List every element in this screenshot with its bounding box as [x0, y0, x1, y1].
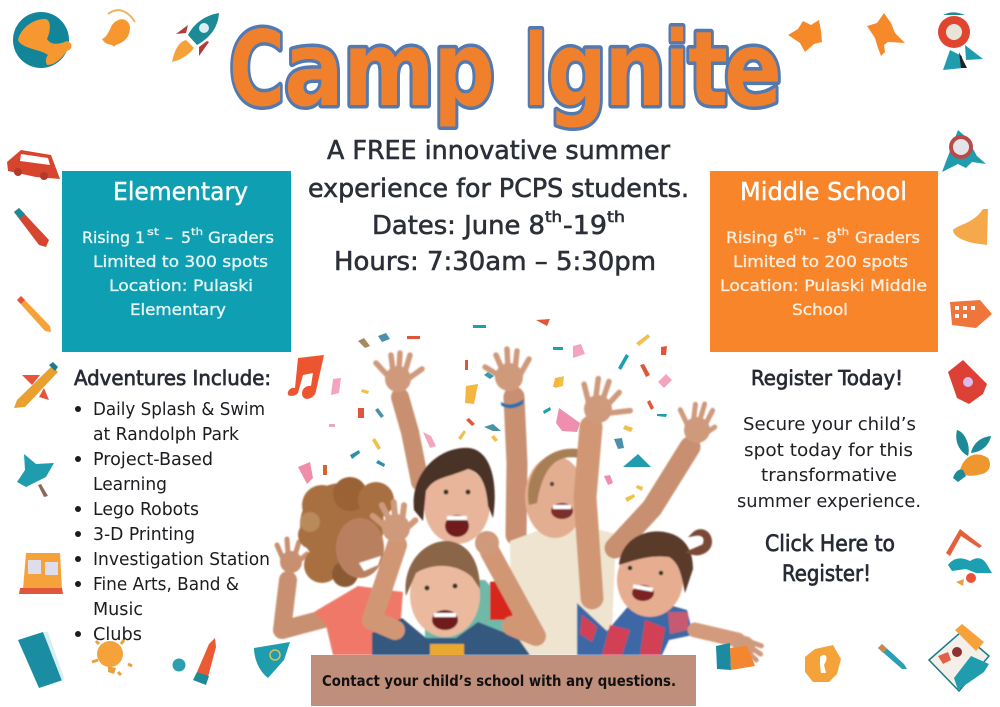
icon: music note	[288, 355, 324, 399]
icon: blue book	[18, 632, 64, 688]
icon: calendar	[950, 300, 992, 328]
bullet items: at Randolph Park	[93, 424, 240, 445]
middle school details: th	[794, 227, 806, 238]
elementary details: Location: Pulaski	[109, 276, 253, 295]
curly child	[282, 580, 327, 630]
title: p	[433, 10, 495, 130]
photo: five cheering children	[277, 349, 765, 663]
adventures list	[74, 366, 271, 645]
call to action: Click Here to	[765, 532, 895, 557]
icon: fish globe	[13, 12, 72, 68]
subtitle block: Dates: June 8	[372, 211, 545, 241]
bullet items: Clubs	[93, 624, 142, 645]
bullet items: Lego Robots	[93, 499, 199, 520]
subtitle block: -19	[563, 211, 607, 241]
right child raised arm	[585, 427, 592, 598]
child: back centre raised arm	[400, 397, 420, 482]
register paragraph: spot today for this	[744, 440, 913, 461]
icon: house and wave	[946, 529, 992, 586]
icon: teal leaf	[17, 454, 54, 497]
curly hair	[298, 477, 394, 587]
icon: rocket	[172, 13, 219, 62]
subtitle block	[308, 136, 689, 277]
title: i	[665, 10, 689, 130]
right front child	[577, 596, 693, 655]
icon: tram	[19, 553, 63, 594]
elementary details: Elementary	[130, 300, 226, 319]
hand: back right	[485, 349, 529, 391]
child: back right raised arm	[514, 397, 517, 535]
register paragraph: summer experience.	[737, 491, 921, 512]
icon: small book in hand	[716, 643, 755, 670]
elementary details	[82, 227, 274, 319]
elementary details: Limited to 300 spots	[93, 252, 268, 271]
register paragraph: Secure your child’s	[743, 414, 916, 435]
icon: school bus	[7, 150, 60, 180]
title: g	[547, 10, 607, 130]
elementary details: st	[147, 227, 159, 238]
contact bar	[311, 655, 696, 706]
icon: orange lock badge	[805, 645, 841, 682]
title: a	[284, 10, 344, 130]
back girl	[510, 527, 616, 655]
icon: teal pencil	[878, 644, 907, 669]
icon: red pencil bottom	[193, 638, 216, 685]
middle school details: Limited to 200 spots	[733, 252, 908, 271]
register paragraph	[737, 414, 921, 512]
bullet items: Learning	[93, 474, 167, 495]
middle school details: th	[837, 227, 849, 238]
title	[229, 10, 782, 130]
middle school details	[720, 227, 927, 319]
bullet items	[75, 399, 270, 645]
panel: elementary	[62, 171, 291, 352]
bullet items: 3-D Printing	[93, 524, 195, 545]
middle school details: Graders	[855, 228, 920, 247]
bullet items: Project-Based	[93, 449, 213, 470]
call to action: Register!	[782, 562, 871, 587]
icon: orange splash	[102, 10, 135, 47]
subtitle block: A FREE innovative summer	[327, 136, 670, 166]
icon: orange splat	[788, 20, 822, 52]
icon: feather	[254, 642, 290, 678]
elementary details: 5	[181, 228, 191, 247]
contact text: Contact your child’s school with any questions.	[322, 672, 676, 690]
icon: pencil rocket	[14, 362, 58, 408]
title: e	[724, 10, 782, 130]
icon: light bulb	[92, 640, 132, 675]
bullet items: Daily Splash & Swim	[93, 399, 265, 420]
subtitle block: th	[545, 208, 562, 226]
middle school details: –	[813, 228, 819, 247]
subtitle block: Hours: 7:30am – 5:30pm	[334, 247, 656, 277]
bullet items: Investigation Station	[93, 549, 270, 570]
panel: middle school	[710, 171, 938, 352]
title: n	[604, 10, 666, 130]
middle school details: Location: Pulaski Middle	[720, 276, 927, 295]
elementary details: th	[191, 227, 203, 238]
elementary details: Rising 1	[82, 228, 145, 247]
elementary details: –	[165, 228, 173, 247]
title: C	[229, 10, 285, 130]
register column	[737, 366, 921, 587]
bullet items: Fine Arts, Band &	[93, 574, 239, 595]
bullet items: Music	[93, 599, 143, 620]
icon: backpack	[948, 360, 987, 404]
hand: boy left	[372, 500, 417, 544]
subtitle block: experience for PCPS students.	[308, 174, 689, 204]
icon: orange pencil	[17, 296, 51, 332]
heading: register today: Register Today!	[751, 366, 903, 390]
heading: middle school: Middle School	[740, 177, 907, 206]
middle school details: Rising 6	[726, 228, 794, 247]
title: I	[524, 10, 548, 130]
icon: orange fish	[867, 13, 905, 56]
front boy	[372, 618, 530, 655]
heading: adventures include: Adventures Include:	[74, 366, 271, 390]
title: m	[343, 10, 435, 130]
icon: teal dot	[172, 658, 186, 672]
hand: boy right	[475, 531, 499, 555]
title: t	[688, 10, 728, 130]
middle school details: 8	[826, 228, 837, 247]
icon: red gear rocket	[938, 12, 983, 70]
heading: elementary: Elementary	[113, 177, 248, 206]
right child far arm	[615, 447, 690, 548]
hand: back centre	[376, 353, 422, 392]
icon: book box	[929, 624, 989, 691]
register paragraph: transformative	[761, 465, 897, 486]
confetti	[298, 319, 672, 502]
icon: bunny	[953, 430, 991, 482]
icon: red pencil	[14, 208, 49, 247]
child 2 centre	[425, 580, 518, 655]
elementary details: Graders	[208, 228, 274, 247]
middle school details: School	[792, 300, 848, 319]
call to action	[765, 532, 895, 587]
icon: orange cone	[953, 209, 988, 245]
subtitle block: th	[607, 208, 625, 226]
icon: teal rocket badge	[942, 130, 986, 172]
